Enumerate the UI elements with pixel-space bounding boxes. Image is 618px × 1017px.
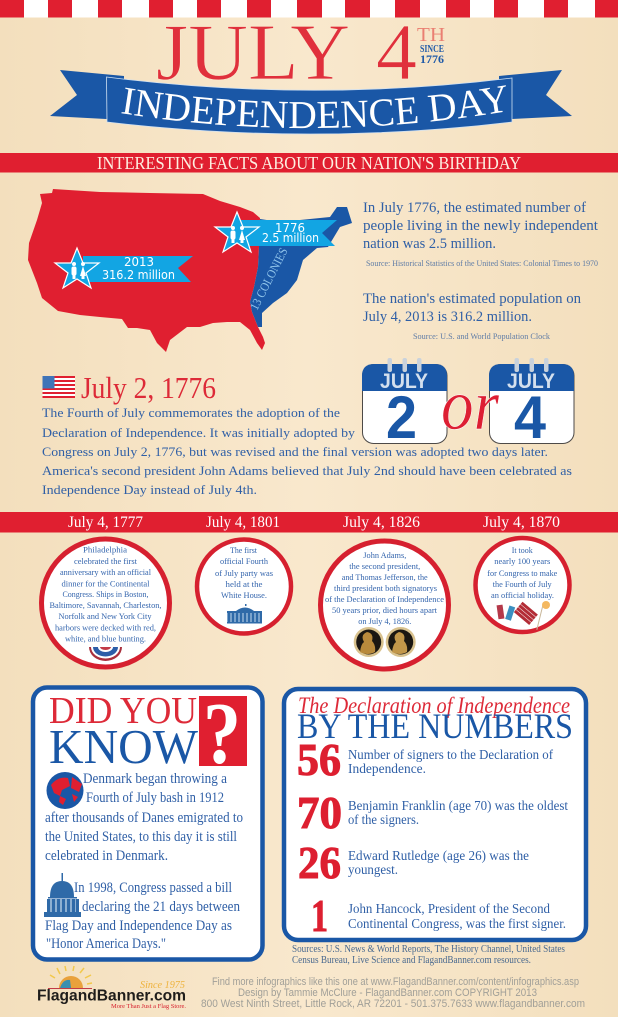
text: July 2 explanation: Declaration of Independence. It was initially adopted by xyxy=(42,425,356,440)
footer credits: 800 West Ninth Street, Little Rock, AR 72201 - 501.375.7633 www.flagandbanner.com xyxy=(201,998,585,1010)
fact: 1 xyxy=(311,890,566,941)
calendar: July 4 xyxy=(489,358,574,451)
banner: 2013: 2013 xyxy=(124,255,154,269)
timeline band xyxy=(0,512,618,532)
icon: flag xyxy=(42,376,75,398)
banner: 1776: 1776 xyxy=(275,221,305,235)
sources: Sources: U.S. News & World Reports, The History Channel, United States xyxy=(292,944,565,955)
circle: 1826: 50 years prior, died hours apart xyxy=(332,605,438,615)
text: Denmark: the United States, to this day it is still xyxy=(45,829,237,845)
circle: 1777: Philadelphia xyxy=(83,545,127,555)
circle: 1801: official Fourth xyxy=(220,556,269,566)
text: Denmark: Denmark began throwing a xyxy=(83,771,228,787)
icon: capitol xyxy=(44,873,81,917)
text: Denmark xyxy=(45,771,243,864)
text: 2013 population: Source: U.S. and World Population Clock xyxy=(413,332,550,341)
text: Congress xyxy=(45,880,241,952)
text: July 2 explanation: The Fourth of July commemorates the adoption of the xyxy=(42,405,340,420)
text: Denmark: after thousands of Danes emigrated to xyxy=(45,810,243,826)
circle: 1870: It took xyxy=(512,545,533,555)
timeline band: July 4, 1801 xyxy=(206,514,280,531)
circle: 1826: the second president, xyxy=(349,561,420,571)
footer credits: Design by Tammie McClure - FlagandBanner.com COPYRIGHT 2013 xyxy=(238,987,537,999)
fact: 1: 1 xyxy=(311,890,328,941)
text: 2013 population xyxy=(363,291,582,341)
calendar: July 4: JULY xyxy=(507,370,555,393)
fact: 1: Continental Congress, was the first signer. xyxy=(348,917,566,932)
US population map xyxy=(28,189,352,352)
text: July 2 explanation xyxy=(42,405,572,497)
text: Congress: "Honor America Days." xyxy=(46,936,166,952)
text: Denmark: celebrated in Denmark. xyxy=(45,848,168,864)
text: Congress: In 1998, Congress passed a bill xyxy=(74,880,232,896)
circle: 1826: on July 4, 1826. xyxy=(358,616,411,626)
fact: 70: Benjamin Franklin (age 70) was the oldest xyxy=(348,799,568,814)
circle: 1777: harbors were decked with red, xyxy=(55,623,156,633)
banner: 2013: 316.2 million xyxy=(102,268,175,282)
ribbon banner xyxy=(50,70,572,134)
heading: did you know: DID YOU xyxy=(49,690,197,732)
heading: did you know: ? xyxy=(203,686,241,783)
circle: 1777: white, and blue bunting. xyxy=(65,634,146,644)
heading: by the numbers: BY THE NUMBERS xyxy=(297,706,573,746)
circle: 1777: anniversary with an official xyxy=(60,567,152,577)
calendar: July 2 xyxy=(362,358,447,451)
subtitle band: INTERESTING FACTS ABOUT OUR NATION'S BIRTHDAY xyxy=(97,153,521,173)
circle: 1826 xyxy=(320,541,448,669)
circle: 1801: held at the xyxy=(226,579,263,589)
sources: Census Bureau, Live Science and FlagandBanner.com resources. xyxy=(292,955,531,966)
text: 2013 population: July 4, 2013 is 316.2 million. xyxy=(363,309,532,325)
icon: White House xyxy=(227,604,262,624)
circle: 1826: and Thomas Jefferson, the xyxy=(342,572,428,582)
circle: 1801 xyxy=(197,540,291,634)
icon: coins xyxy=(354,627,416,657)
logo: FlagandBanner.com xyxy=(37,988,186,1004)
banner: 1776: 2.5 million xyxy=(262,231,319,245)
footer credits xyxy=(201,976,585,1010)
icon: globe xyxy=(46,772,84,809)
fact: 26: youngest. xyxy=(348,863,398,878)
title: TH xyxy=(417,24,445,46)
fact: 26 xyxy=(298,837,529,888)
fact: 70: 70 xyxy=(297,787,342,838)
text: July 2 explanation: Independence Day instead of July 4th. xyxy=(42,482,257,497)
banner: 1776 xyxy=(215,212,337,252)
text: 1776 population: nation was 2.5 million. xyxy=(363,236,496,252)
banner: 2013 xyxy=(55,248,193,288)
fact: 70 xyxy=(297,787,568,838)
circle: 1777: dinner for the Continental xyxy=(62,579,150,589)
text: 1776 population: In July 1776, the estimated number of xyxy=(363,200,586,216)
circle: 1870: for Congress to make xyxy=(487,568,557,578)
circle: 1777 xyxy=(42,539,170,667)
circle: 1777: Baltimore, Savannah, Charleston, xyxy=(50,600,162,610)
map: 13 colonies xyxy=(250,207,352,327)
circle: 1826: third president both signatorys xyxy=(334,583,438,593)
circle: 1826: John Adams, xyxy=(363,550,406,560)
circle: 1826: of the Declaration of Independence xyxy=(325,594,444,604)
circle: 1870: the Fourth of July xyxy=(493,579,552,589)
timeline band: July 4, 1870 xyxy=(483,514,560,531)
circle: 1801: The first xyxy=(230,545,258,555)
circle: 1870 xyxy=(476,538,570,632)
heading: by the numbers: The Declaration of Independence xyxy=(298,693,570,718)
text: July 2 explanation: America's second president John Adams believed that July 2nd should have been celebrated as xyxy=(42,463,572,478)
circle: 1801: White House. xyxy=(221,590,267,600)
icon: bunting xyxy=(89,647,122,661)
logo: More Than Just a Flag Store. xyxy=(111,1003,186,1010)
text: Congress: declaring the 21 days between xyxy=(82,899,241,915)
fact: 70: of the signers. xyxy=(348,813,419,828)
circle: 1870: an official holiday. xyxy=(491,590,554,600)
or: or xyxy=(441,365,500,445)
title: 1776 xyxy=(420,52,444,66)
panel: by the numbers xyxy=(284,689,586,941)
icon: fireworks xyxy=(497,601,550,630)
heading: did you know xyxy=(49,686,247,783)
text: 1776 population: people living in the newly independent xyxy=(363,218,598,234)
icon: sun and globe xyxy=(48,966,92,989)
fact: 26: Edward Rutledge (age 26) was the xyxy=(348,849,529,864)
circle: 1777: celebrated the first xyxy=(74,556,138,566)
title: 4 xyxy=(376,9,417,97)
heading: July 2, 1776: July 2, 1776 xyxy=(81,370,216,405)
text: 2013 population: The nation's estimated population on xyxy=(363,291,582,307)
text: Congress: Flag Day and Independence Day as xyxy=(45,918,232,934)
title: JULY xyxy=(156,9,350,97)
circle: 1777: Norfolk and New York City xyxy=(58,611,152,621)
map: contiguous states xyxy=(28,189,265,352)
circle: 1870: nearly 100 years xyxy=(494,556,551,566)
fact: 56: Number of signers to the Declaration of xyxy=(348,748,553,763)
heading: by the numbers xyxy=(297,693,573,746)
ribbon banner: INDEPENDENCE DAY xyxy=(121,85,506,128)
title: SINCE xyxy=(420,43,444,55)
text: July 2 explanation: Congress on July 2, 1776, but was revised and the final version was adopted two days later. xyxy=(42,444,548,459)
fact: 1: John Hancock, President of the Second xyxy=(348,902,550,917)
calendar: July 4: 4 xyxy=(514,384,547,451)
fact: 56: Independence. xyxy=(348,762,426,777)
fact: 56: 56 xyxy=(297,734,341,785)
heading: did you know: KNOW xyxy=(49,719,199,774)
text: 1776 population xyxy=(363,200,598,268)
label: 13 colonies: 13 COLONIES xyxy=(247,245,291,312)
logo: Since 1975 xyxy=(140,979,185,991)
fact: 26: 26 xyxy=(298,837,341,888)
logo xyxy=(37,966,186,1010)
sources xyxy=(292,944,565,966)
timeline band: July 4, 1777 xyxy=(68,514,143,531)
text: 1776 population: Source: Historical Statistics of the United States: Colonial Times to 1970 xyxy=(366,259,598,268)
panel: did you know xyxy=(33,686,262,960)
timeline band: July 4, 1826 xyxy=(343,514,420,531)
calendar: July 2: JULY xyxy=(380,370,428,393)
calendar: July 2: 2 xyxy=(386,384,417,451)
top stripes xyxy=(0,0,618,18)
circle: 1801: of July party was xyxy=(215,568,274,578)
fact: 56 xyxy=(297,734,553,785)
text: Denmark: Fourth of July bash in 1912 xyxy=(86,790,224,806)
title xyxy=(156,9,445,97)
circle: 1777: Congress. Ships in Boston, xyxy=(62,589,148,599)
